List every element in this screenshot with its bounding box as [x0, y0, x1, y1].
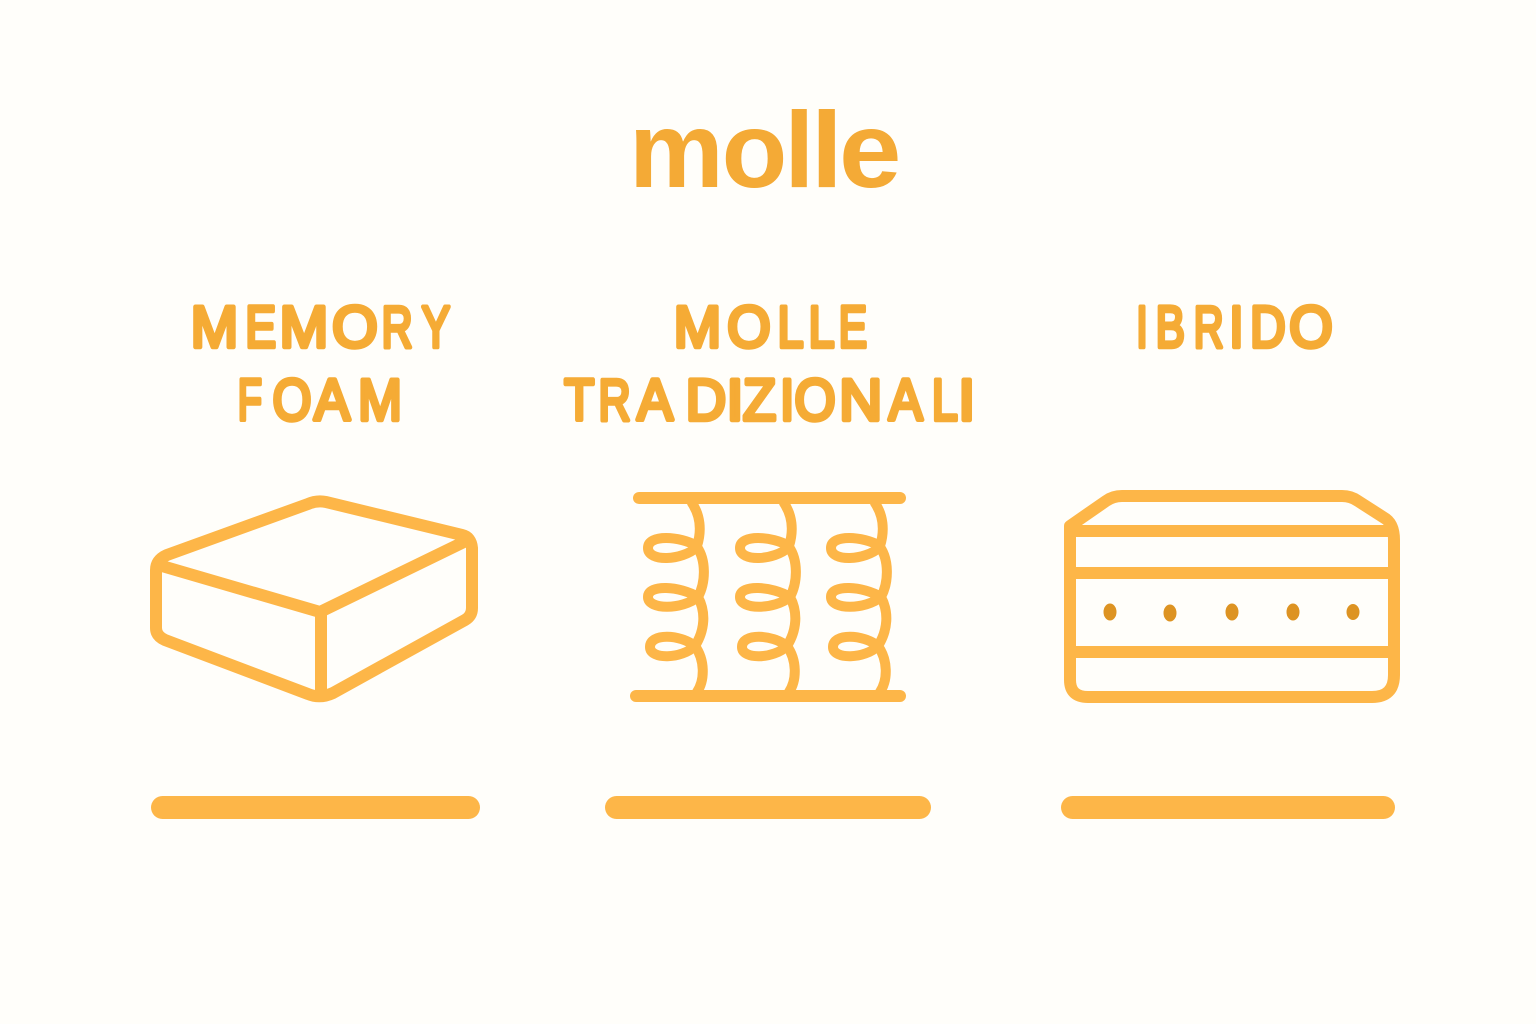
- icon: springs: [636, 498, 900, 696]
- heading: memory foam: O: [273, 368, 311, 433]
- bar: ibrido: [1061, 796, 1395, 819]
- title: l: [811, 89, 843, 210]
- heading: molle tradizionali: Z: [743, 368, 776, 433]
- heading: molle tradizionali: E: [839, 295, 867, 360]
- heading: molle tradizionali: I: [726, 368, 744, 433]
- heading: ibrido: R: [1194, 295, 1224, 360]
- title: o: [722, 89, 787, 210]
- heading: molle tradizionali: O: [727, 295, 771, 360]
- heading: molle tradizionali: I: [958, 368, 975, 433]
- panel: molle tradizionali: [564, 295, 975, 819]
- spring column 2: [740, 503, 796, 692]
- heading: memory foam: M: [191, 295, 238, 360]
- heading: memory foam: R: [382, 295, 412, 360]
- heading: molle tradizionali: I: [780, 368, 794, 433]
- heading: memory foam: [191, 295, 450, 433]
- heading: ibrido: I: [1229, 295, 1244, 360]
- heading: molle tradizionali: L: [809, 295, 834, 360]
- title: e: [839, 89, 901, 210]
- heading: molle tradizionali: L: [778, 295, 804, 360]
- heading: memory foam: F: [238, 368, 262, 433]
- title: l: [784, 89, 815, 210]
- heading: ibrido: O: [1289, 295, 1333, 360]
- heading: molle tradizionali: A: [637, 368, 673, 433]
- spring column 1: [648, 503, 704, 692]
- heading: molle tradizionali: N: [839, 368, 882, 433]
- heading: ibrido: I: [1136, 295, 1148, 360]
- panel: memory foam: [151, 295, 480, 819]
- heading: molle tradizionali: A: [889, 368, 923, 433]
- heading: molle tradizionali: M: [674, 295, 721, 360]
- bar: molle tradizionali: [605, 796, 931, 819]
- heading: molle tradizionali: R: [598, 368, 631, 433]
- panel: ibrido: [1061, 295, 1395, 819]
- heading: molle tradizionali: D: [686, 368, 726, 433]
- heading: molle tradizionali: [564, 295, 975, 433]
- heading: memory foam: O: [332, 295, 378, 360]
- heading: memory foam: M: [280, 295, 328, 360]
- heading: memory foam: E: [245, 295, 276, 360]
- heading: memory foam: M: [358, 368, 402, 433]
- icon: foam block: [156, 501, 472, 696]
- heading: ibrido: D: [1250, 295, 1286, 360]
- heading: memory foam: A: [314, 368, 350, 433]
- dots: [1104, 604, 1360, 622]
- title: m: [629, 89, 724, 210]
- heading: memory foam: Y: [422, 295, 450, 360]
- heading: molle tradizionali: O: [794, 368, 836, 433]
- spring column 3: [831, 503, 887, 692]
- heading: molle tradizionali: L: [932, 368, 958, 433]
- bar: memory foam: [151, 796, 480, 819]
- heading: molle tradizionali: T: [564, 368, 594, 433]
- icon: hybrid mattress: [1070, 496, 1394, 697]
- heading: ibrido: B: [1156, 295, 1185, 360]
